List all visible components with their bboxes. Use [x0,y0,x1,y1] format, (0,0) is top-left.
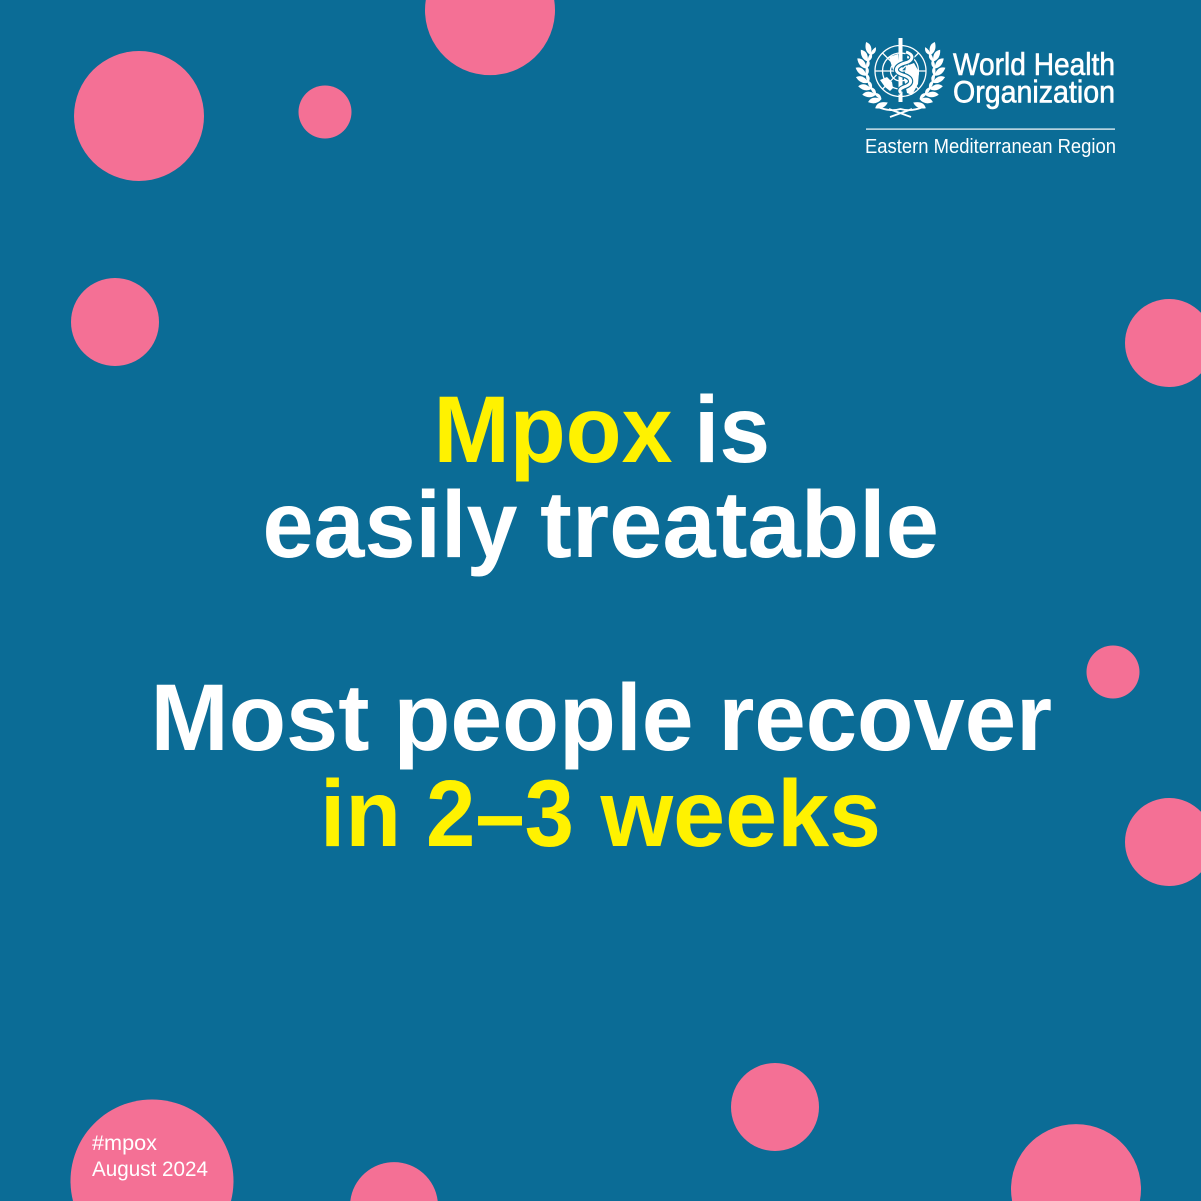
heading line 1: Mpox [434,377,672,483]
heading line 3 [150,665,1052,771]
continents [880,52,919,95]
region name: Eastern Mediterranean Region [865,135,1116,158]
laurel wreath right [913,42,945,112]
date: August 2024 [92,1158,208,1181]
main message [150,377,1052,867]
organization name [953,46,1115,110]
heading line 3: recover [718,665,1052,771]
name line 2: Organization [953,74,1115,110]
staff and serpent [896,38,912,102]
heading line 3: Most [150,665,370,771]
globe rings [875,46,926,96]
heading line 2 [262,472,939,578]
heading line 2: easily [262,472,518,578]
heading line 4: 2–3 [426,761,574,867]
laurel wreath left [856,42,888,112]
heading line 1: is [694,377,770,483]
icon: WHO emblem [856,38,945,117]
hashtag: #mpox [92,1132,158,1155]
hashtag and date [92,1132,208,1181]
heading line 4: in [320,761,401,867]
heading line 4 [320,761,881,867]
heading line 2: treatable [540,472,939,578]
WHO logo [856,38,1116,158]
name line 1: World Health [953,46,1115,82]
heading line 4: weeks [600,761,881,867]
logo divider [866,128,1115,130]
ribbon [878,107,923,117]
heading line 3: people [394,665,694,771]
